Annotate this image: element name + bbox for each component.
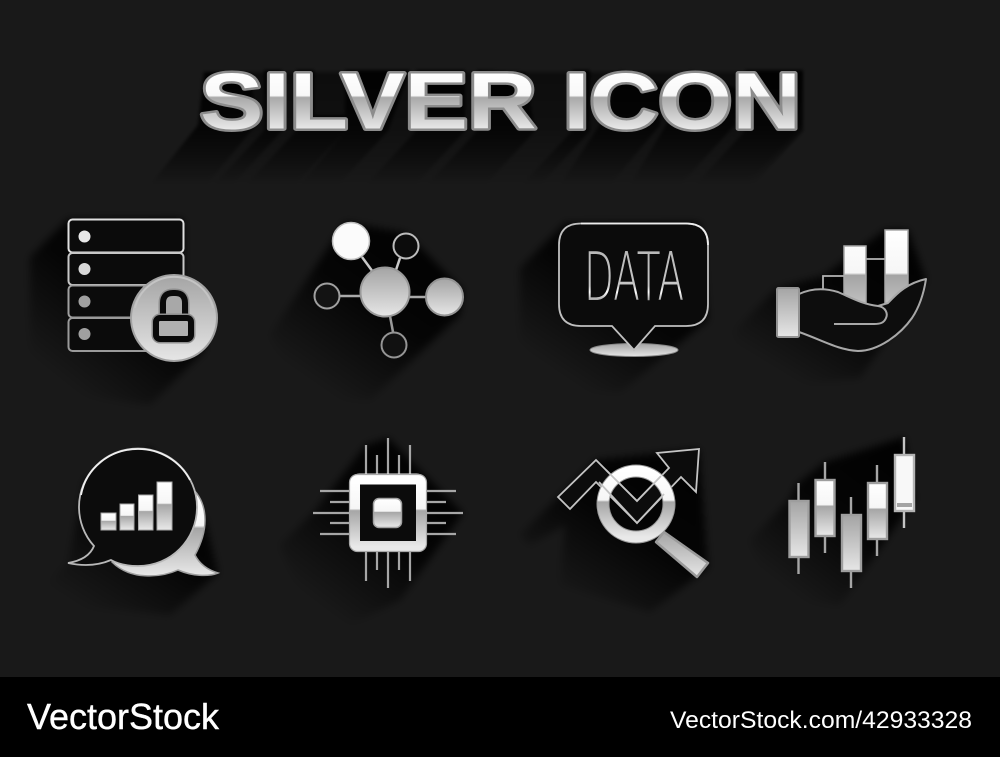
footer band [0,677,1000,757]
footer: brand: VectorStock [27,696,220,737]
icon: speech bubbles with signal bars [68,448,218,576]
lock symbol [156,293,191,339]
cuff [777,288,799,337]
icon: data speech bubble [559,224,708,356]
chip core [374,498,402,528]
icon: magnifier over rising arrow [558,449,708,577]
footer: image id: VectorStock.com/42933328 [670,707,972,734]
label: DATA: DATA [584,238,684,316]
icon: network nodes [314,222,463,358]
icon: candlestick chart [790,437,914,588]
icon: server with lock [68,220,217,361]
title: SILVER ICON [200,56,801,146]
magnifier [603,471,708,577]
icon: microchip [313,438,463,588]
icon: hand holding bar chart [777,230,926,351]
signal bars [101,482,172,530]
hand outline [799,279,926,351]
